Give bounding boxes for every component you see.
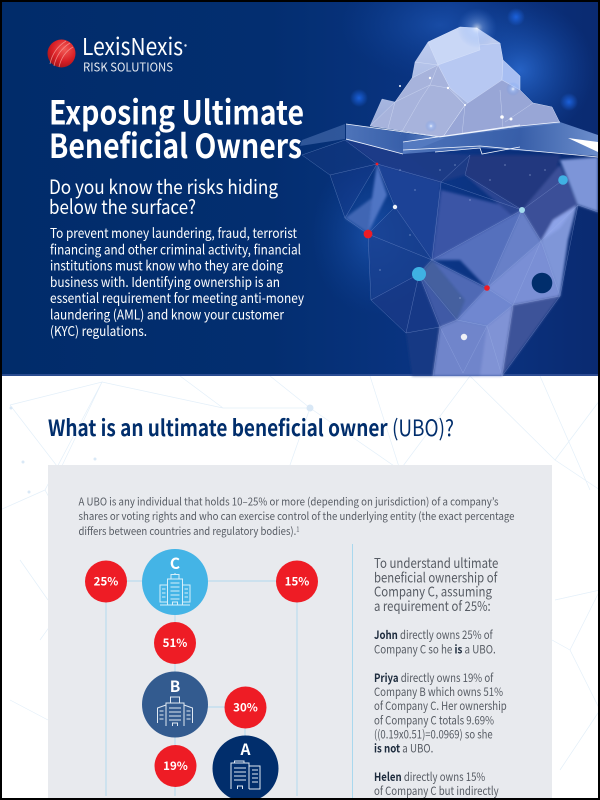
underwater specks <box>379 164 546 299</box>
ownership percentages: 19% <box>163 758 188 774</box>
title: Exposing Ultimate <box>49 86 304 134</box>
example: Priya: is not a UBO. <box>374 740 433 756</box>
node: company C <box>142 549 208 615</box>
intro paragraph: business with. Identifying ownership is an <box>50 271 280 291</box>
network nodes <box>364 163 568 340</box>
ownership diagram <box>85 549 318 800</box>
logo: globe <box>48 40 76 68</box>
panel: UBO explanation <box>48 465 552 800</box>
icon: building C <box>160 573 190 605</box>
example intro: To understand ultimate <box>374 553 498 572</box>
ownership percentages: 51% <box>163 635 187 651</box>
ownership percentages: 30% <box>233 700 258 716</box>
water surface band <box>300 122 598 157</box>
subtitle: below the surface? <box>49 191 196 220</box>
worked example text <box>374 553 507 799</box>
definition paragraph: differs between countries and regulatory bodies). <box>78 524 323 539</box>
subtitle <box>49 171 278 220</box>
connector lines <box>106 581 297 796</box>
example intro: Company C, assuming <box>374 582 492 600</box>
example intro: a requirement of 25%: <box>374 596 491 615</box>
example: Priya <box>374 670 507 756</box>
example: Priya: Priya directly owns 19% of <box>374 670 494 686</box>
intro paragraph: essential requirement for meeting anti-money <box>50 287 304 307</box>
example: Priya: Company B which owns 51% <box>374 684 503 700</box>
node: company B <box>142 672 208 738</box>
title <box>49 86 304 168</box>
background network pattern <box>0 376 600 770</box>
ownership percentages: 25% <box>94 574 118 590</box>
definition paragraph <box>78 494 515 539</box>
subtitle: Do you know the risks hiding <box>49 171 278 200</box>
node: company A: A <box>240 738 251 760</box>
example: John: Company C so he is a UBO. <box>374 642 496 658</box>
ownership percentages: 15% <box>285 574 309 590</box>
vertical divider <box>352 544 353 798</box>
iceberg above the surface <box>370 27 560 137</box>
example: Helen <box>374 769 499 799</box>
intro paragraph: laundering (AML) and know your customer <box>50 304 285 324</box>
ownership percentages <box>94 574 309 774</box>
node: company C: C <box>170 552 180 574</box>
intro paragraph: institutions must know who they are doing <box>50 254 283 274</box>
example: John: John directly owns 25% of <box>374 627 494 643</box>
underwater facets <box>302 140 598 376</box>
example: Priya: of Company C. Her ownership <box>374 698 507 714</box>
logo: wordmark: LexisNexis <box>82 28 183 62</box>
example: Helen: of Company C but indirectly <box>374 783 499 799</box>
intro paragraph: (KYC) regulations. <box>50 320 147 340</box>
logo: tagline: RISK SOLUTIONS <box>83 58 173 76</box>
example: Helen: Helen directly owns 15% <box>374 769 486 785</box>
ownership badges <box>85 560 318 787</box>
icon: building A <box>231 761 260 789</box>
definition paragraph: A UBO is any individual that holds 10–25% or more (depending on jurisdiction) of a company’s <box>78 494 498 510</box>
intro paragraph <box>50 222 304 340</box>
example: Priya: ((0.19x0.51)=0.0969) so she <box>374 726 493 742</box>
logo: registered mark <box>184 44 187 47</box>
hero panel <box>0 0 600 376</box>
example intro: beneficial ownership of <box>374 567 498 586</box>
node: company A <box>212 736 278 800</box>
iceberg below the surface <box>302 140 598 376</box>
iceberg lights <box>399 8 520 132</box>
definition paragraph: 1 <box>296 524 300 534</box>
intro paragraph: To prevent money laundering, fraud, terrorist <box>50 222 297 242</box>
section heading: What is an ultimate beneficial owner (UBO)? <box>48 411 454 443</box>
intro paragraph: financing and other criminal activity, financial <box>50 238 301 258</box>
underwater mesh lines <box>302 140 598 376</box>
background network dots <box>10 404 314 494</box>
icon: building B <box>158 697 192 726</box>
title: Beneficial Owners <box>49 120 302 168</box>
example intro <box>374 553 498 615</box>
logo <box>48 28 187 76</box>
node: company B: B <box>170 675 180 697</box>
definition paragraph: shares or voting rights and who can exercise control of the underlying entity (the exact percentage <box>78 509 515 524</box>
example: John <box>374 627 496 658</box>
example: Priya: of Company C totals 9.69% <box>374 712 494 728</box>
